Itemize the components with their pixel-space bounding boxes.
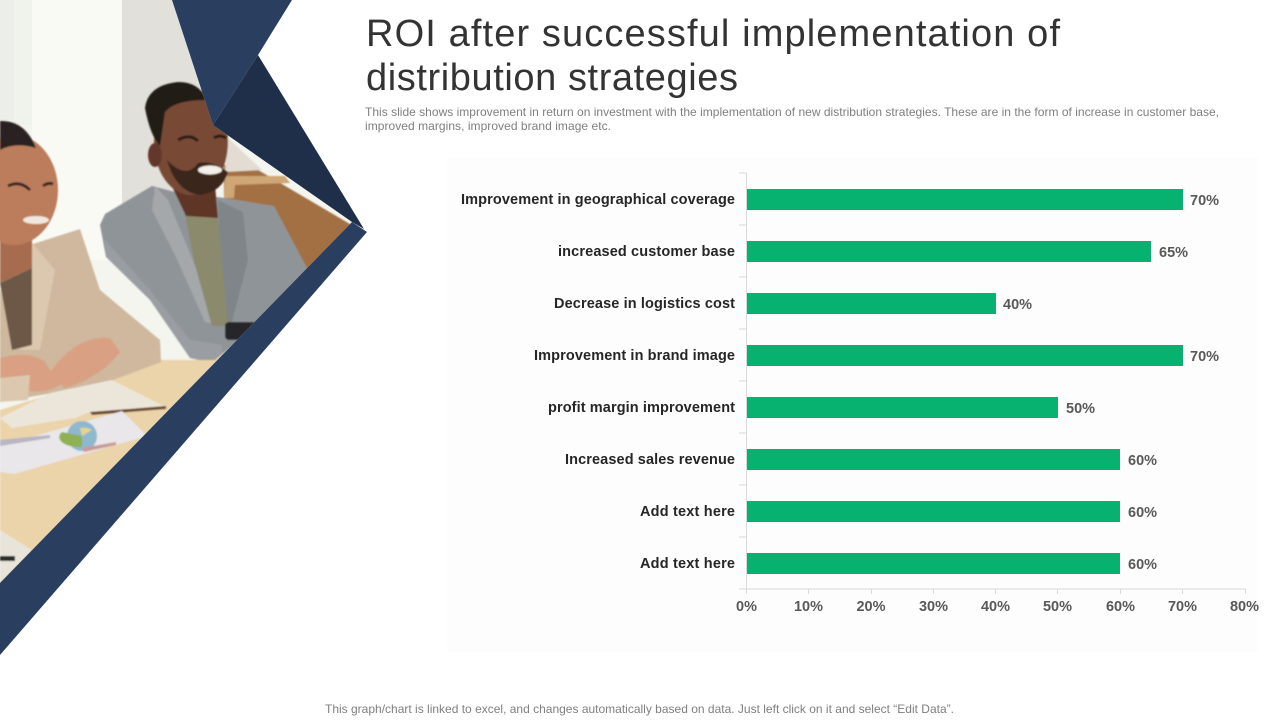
title: ROI after successful implementation of: [366, 13, 1060, 55]
row: profit margin improvement: [548, 397, 1095, 418]
wooden cabinet behind the man: [222, 164, 350, 269]
x axis labels: 60%: [1106, 599, 1135, 615]
row: Add text here: [640, 553, 1157, 574]
subtitle description: [365, 105, 1219, 133]
x axis labels: [736, 599, 1259, 615]
row: Decrease in logistics cost: 40%: [1003, 297, 1032, 313]
row: Increased sales revenue: Increased sales revenue: [565, 452, 735, 468]
subtitle description: improved margins, improved brand image etc.: [365, 119, 611, 133]
title: distribution strategies: [366, 57, 738, 99]
row: Improvement in geographical coverage: [461, 189, 1219, 210]
woman's top: [0, 268, 32, 350]
watch: [225, 322, 257, 340]
woman's jacket: [0, 229, 161, 402]
x axis labels: 30%: [919, 599, 948, 615]
woman's hair: [0, 121, 36, 150]
table: [0, 344, 232, 583]
man's t-shirt: [185, 215, 228, 326]
row: Increased sales revenue: [565, 449, 1157, 470]
x axis labels: 10%: [794, 599, 823, 615]
woman's hands: [0, 355, 60, 392]
row: Improvement in brand image: Improvement in brand image: [534, 348, 735, 364]
printed report with pie chart: [0, 411, 147, 474]
row: profit margin improvement: 50%: [1066, 401, 1095, 417]
row: Increased sales revenue: 60%: [1128, 453, 1157, 469]
row: profit margin improvement: profit margin improvement: [548, 400, 735, 416]
panel: chart card: [447, 157, 1258, 652]
man's neck: [172, 188, 219, 219]
man's hair: [145, 82, 206, 146]
x axis labels: 20%: [856, 599, 886, 615]
x axis labels: 50%: [1043, 599, 1072, 615]
x axis labels: 40%: [981, 599, 1010, 615]
woman's smile: [23, 216, 49, 224]
row: Improvement in brand image: 70%: [1190, 349, 1219, 365]
row: Add text here: 60%: [1128, 557, 1157, 573]
x axis labels: 0%: [736, 599, 757, 615]
man's head: [154, 89, 228, 195]
white object at table edge: [0, 530, 32, 582]
man's jacket: [100, 186, 308, 365]
footer note: This graph/chart is linked to excel, and changes automatically based on data. Just left click on it and select “Edit Data”.: [325, 702, 954, 716]
row: increased customer base: [558, 241, 1188, 262]
row: Add text here: Add text here: [640, 556, 735, 572]
man's smile: [198, 166, 222, 174]
woman's neck: [0, 240, 33, 284]
navy diagonal band: [0, 222, 367, 655]
row: Add text here: [640, 501, 1157, 522]
title: [366, 13, 1060, 99]
photo: two colleagues smiling at a meeting table: [0, 0, 352, 583]
row: Add text here: 60%: [1128, 505, 1157, 521]
dark navy triangle: [213, 55, 364, 229]
bar chart: [461, 173, 1259, 615]
notebook: [0, 380, 166, 428]
navy geometric frame: [0, 0, 367, 655]
man's eyes: [178, 136, 226, 141]
navy top triangle: [172, 0, 292, 125]
row: Improvement in geographical coverage: Improvement in geographical coverage: [461, 192, 735, 208]
x axis labels: 80%: [1230, 599, 1259, 615]
row: increased customer base: increased customer base: [558, 244, 735, 260]
man's beard: [167, 160, 228, 195]
woman's eyes: [8, 183, 53, 190]
row: Improvement in brand image: [534, 345, 1219, 366]
x axis labels: 70%: [1168, 599, 1197, 615]
row: Add text here: Add text here: [640, 504, 735, 520]
row: Improvement in geographical coverage: 70%: [1190, 193, 1219, 209]
row: Decrease in logistics cost: [554, 293, 1032, 314]
row: increased customer base: 65%: [1159, 245, 1188, 261]
subtitle description: This slide shows improvement in return on investment with the implementation of new distribution strategies. These are in the form of increase in customer base,: [365, 105, 1219, 119]
woman's face: [0, 135, 58, 245]
row: Decrease in logistics cost: Decrease in logistics cost: [554, 296, 735, 312]
